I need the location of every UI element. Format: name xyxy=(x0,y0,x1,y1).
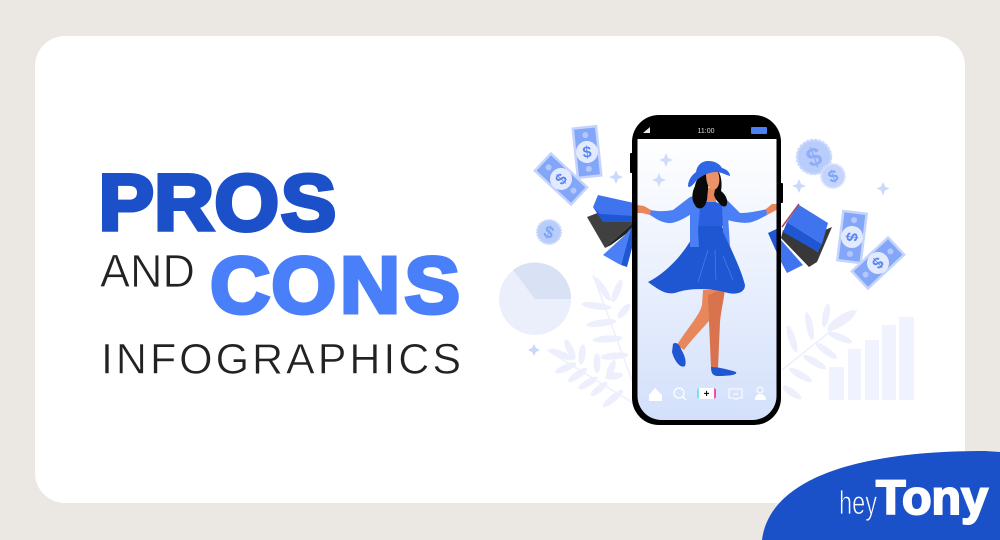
logo text: hey xyxy=(839,484,877,521)
logo blue shape xyxy=(762,451,1000,540)
heading word: CONS: CONS xyxy=(210,241,460,330)
phone xyxy=(630,115,783,425)
icon: small coin right xyxy=(821,164,845,188)
front leg xyxy=(708,288,725,368)
icon: search xyxy=(674,388,686,400)
right jacket panel xyxy=(716,194,730,247)
sparkles outside phone xyxy=(528,170,890,356)
icon: large coin right: $ xyxy=(802,140,826,174)
torso xyxy=(698,200,723,226)
icon: small coin right: $ xyxy=(825,166,841,187)
heading: pros and cons infographics xyxy=(98,158,461,384)
icon: dollar bill left: $ xyxy=(552,171,571,189)
icon: message xyxy=(729,389,742,400)
phone body xyxy=(632,115,781,425)
left arm xyxy=(650,197,695,223)
shopping bags right xyxy=(781,204,832,273)
right plant decoration xyxy=(781,303,858,402)
battery icon xyxy=(751,127,767,134)
skirt fold lines xyxy=(698,250,733,282)
icon: dollar bill lower right xyxy=(850,236,906,290)
heading word: AND: AND xyxy=(100,245,195,297)
pie chart decoration xyxy=(499,262,571,335)
hat xyxy=(688,161,730,187)
logo badge: Tony xyxy=(876,472,988,525)
face xyxy=(706,171,719,190)
shopping bag piece inside screen xyxy=(768,229,776,252)
signal icon xyxy=(643,127,650,133)
icon: dollar bill right: $ xyxy=(842,231,860,242)
neck xyxy=(706,188,716,202)
phone side buttons xyxy=(630,153,634,173)
bar chart decoration xyxy=(829,317,914,400)
icon: dollar bill top left: $ xyxy=(582,144,593,162)
icon: dollar bill top left xyxy=(571,125,603,179)
shopping bags left xyxy=(587,195,638,267)
icon: profile xyxy=(755,387,766,400)
icon: dollar bill right xyxy=(836,210,868,264)
status bar time: 11:00 xyxy=(698,128,715,135)
left plant decoration xyxy=(547,275,633,410)
shoes xyxy=(672,343,686,367)
skirt xyxy=(648,226,745,294)
icon: large coin right xyxy=(797,140,831,174)
heading word: PROS: PROS xyxy=(98,158,336,248)
phone navigation bar xyxy=(649,387,766,401)
right arm xyxy=(722,200,767,223)
icon: coin left: $ xyxy=(541,222,557,243)
left jacket panel xyxy=(690,195,700,247)
icon: coin left xyxy=(537,220,561,244)
icon: add button: + xyxy=(704,389,710,400)
icon: dollar bill lower right: $ xyxy=(868,253,886,272)
phone screen xyxy=(638,139,776,420)
icon: home xyxy=(649,388,662,401)
back leg xyxy=(677,290,722,350)
logo badge xyxy=(762,451,1000,540)
heading word: INFOGRAPHICS: INFOGRAPHICS xyxy=(101,336,461,384)
hands xyxy=(638,205,651,215)
icon: dollar bill left xyxy=(533,152,589,206)
sparkles inside phone xyxy=(652,153,673,187)
woman figure xyxy=(638,161,776,376)
hair xyxy=(692,171,727,208)
